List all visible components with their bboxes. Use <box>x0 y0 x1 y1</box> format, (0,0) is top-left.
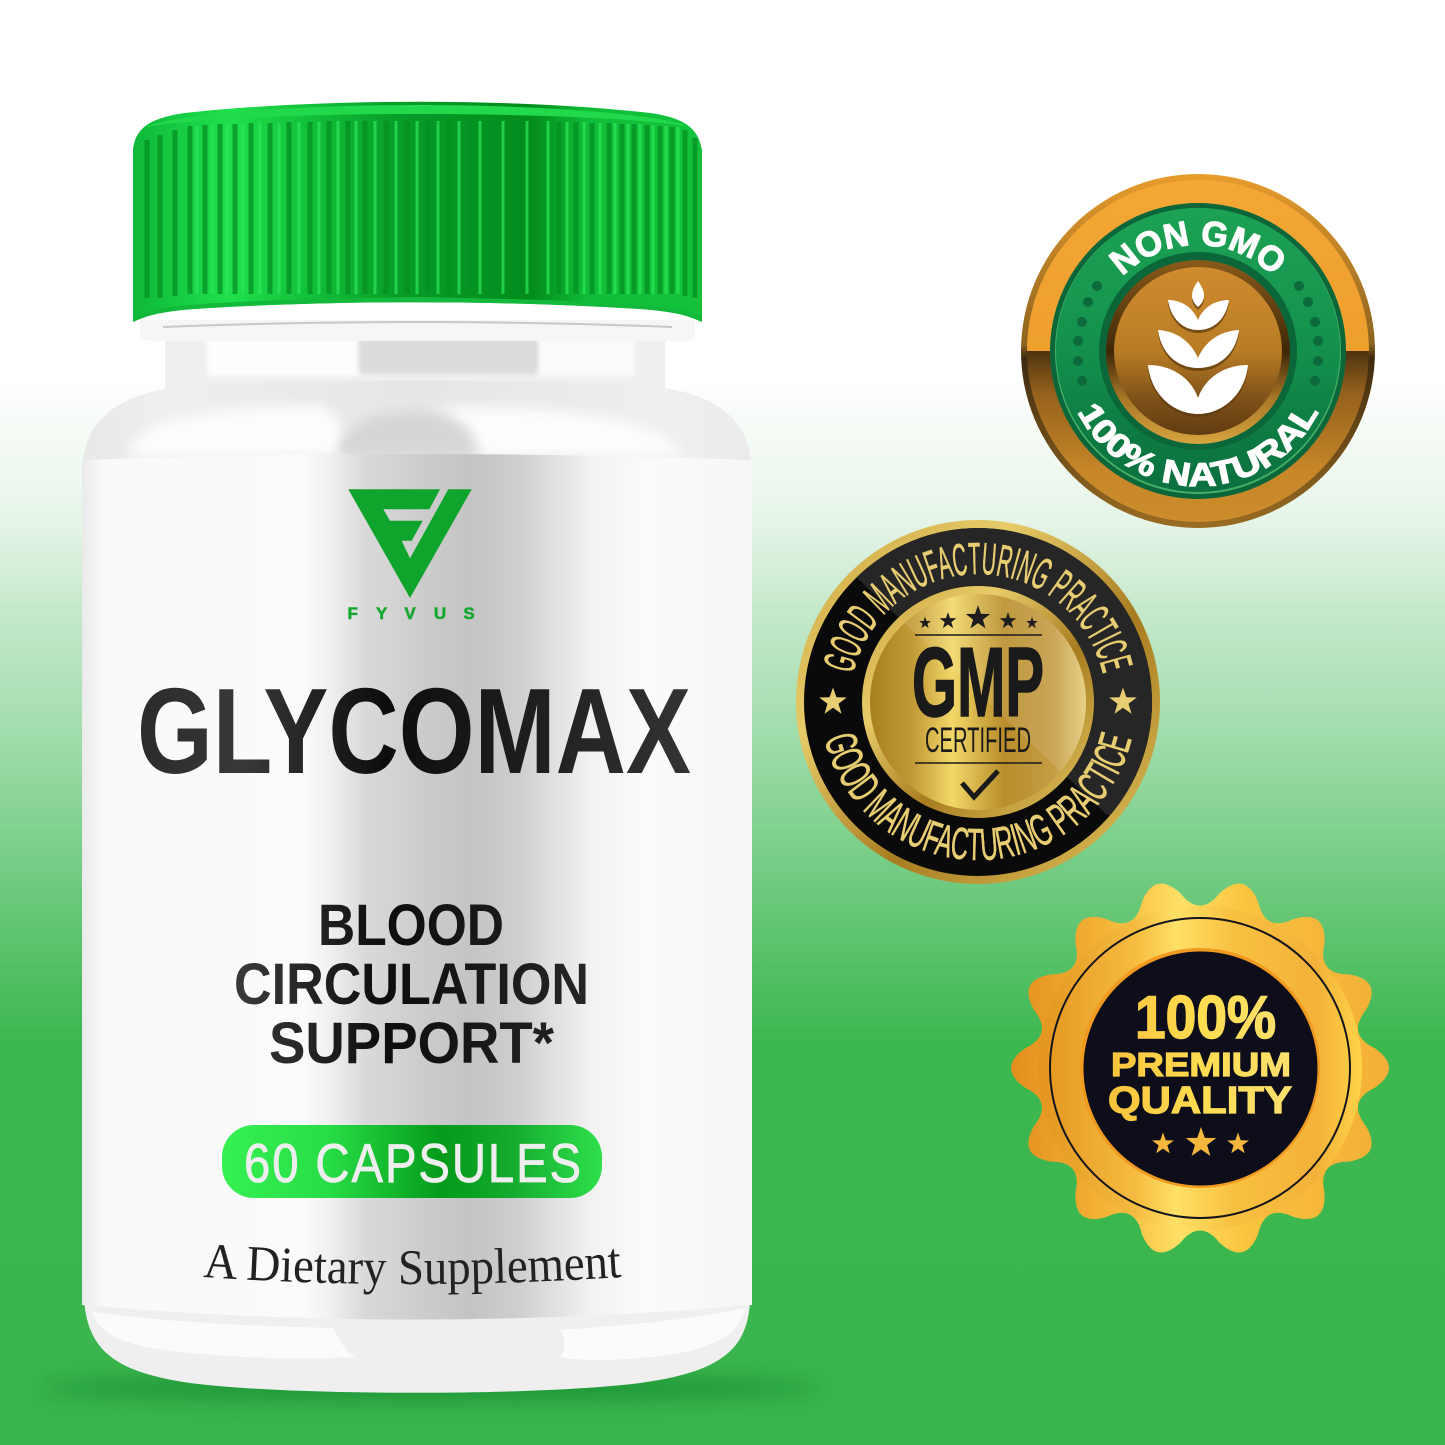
green text band <box>1050 203 1346 499</box>
ring arc text: GOOD MANUFACTURING PRACTICE <box>824 542 1133 674</box>
bottle label wrap <box>82 454 752 1320</box>
benefit text: SUPPORT* <box>269 1011 554 1076</box>
disc text: GMP <box>912 627 1044 737</box>
band dots <box>1073 281 1323 386</box>
ring stars <box>819 688 1137 714</box>
badge arc text: 100% NATURAL <box>1078 404 1320 487</box>
inner disc <box>1099 252 1297 450</box>
bottle base <box>84 1300 750 1393</box>
gold center disc <box>862 586 1094 818</box>
gold rim and black ring <box>796 520 1160 884</box>
ring arc text: GOOD MANUFACTURING PRACTICE <box>826 731 1132 860</box>
gold rings <box>1038 906 1362 1230</box>
seal text: PREMIUM <box>1111 1046 1291 1083</box>
badge: non gmo <box>1021 174 1375 528</box>
check mark <box>962 771 998 797</box>
badge arc text <box>1078 220 1320 487</box>
dark center <box>1084 952 1318 1186</box>
logo wordmark: FYVUS <box>348 604 475 623</box>
bottle cap <box>133 102 702 322</box>
ring arc text <box>824 542 1133 860</box>
badge arc text: NON GMO <box>1108 220 1284 276</box>
wheat icon <box>1148 281 1248 417</box>
bottle neck <box>140 320 695 405</box>
dietary supplement text: A Dietary Supplement <box>203 1245 622 1294</box>
product name: GLYCOMAX <box>137 663 691 799</box>
scalloped seal <box>1011 883 1389 1253</box>
outer orange ring <box>1021 174 1375 528</box>
disc text: CERTIFIED <box>925 721 1031 760</box>
benefit text: CIRCULATION <box>234 952 589 1017</box>
benefit text: BLOOD <box>318 893 504 958</box>
badge: gmp certified <box>796 520 1160 884</box>
disc text <box>912 627 1044 763</box>
badge: premium quality <box>1011 883 1389 1253</box>
logo mark <box>348 489 472 598</box>
brand logo <box>348 489 475 623</box>
disc stars <box>919 605 1038 628</box>
supplement bottle <box>82 102 752 1393</box>
seal stars <box>1152 1127 1249 1156</box>
bottle shoulder <box>82 380 752 470</box>
seal text <box>1108 984 1292 1122</box>
seal text: 100% <box>1135 984 1276 1051</box>
capsule count pill: 60 CAPSULES <box>244 1133 581 1194</box>
bottle shadow <box>40 1374 820 1402</box>
seal text: QUALITY <box>1108 1080 1292 1122</box>
benefit text <box>234 893 589 1076</box>
